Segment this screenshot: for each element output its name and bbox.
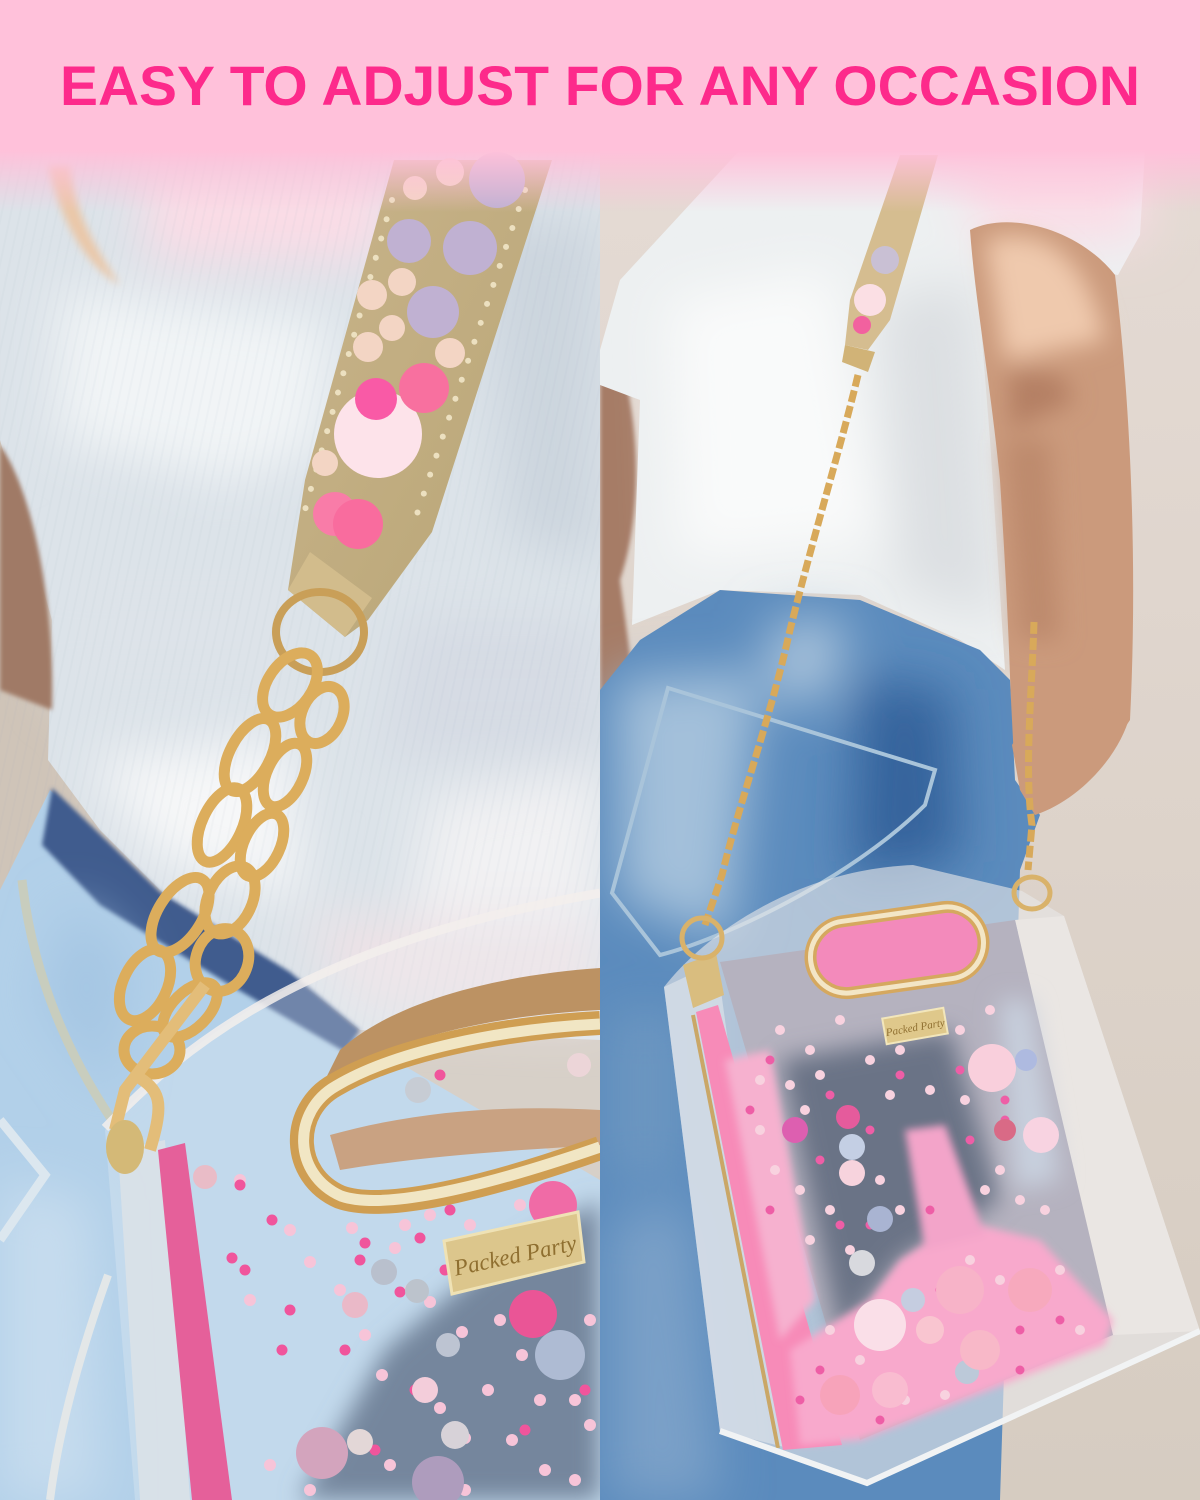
textured gold backing [325, 968, 600, 1080]
right decorated strap [842, 155, 938, 372]
strap sequins cream [312, 158, 465, 476]
right large sequins [782, 1044, 1059, 1415]
right upper arm [970, 222, 1134, 744]
left chunky gold chain [109, 592, 364, 1150]
header band [0, 0, 1200, 150]
left confetti hot pink [232, 1075, 585, 1450]
strap stitch dots [305, 190, 525, 520]
panel: right full bag photo [600, 155, 1200, 1500]
right bag handle [806, 902, 988, 998]
rose band inside handle [330, 1108, 600, 1170]
pink pouch zipper [158, 1143, 232, 1500]
bag interior shadow [300, 1200, 600, 1500]
left gold oval handle [302, 1023, 600, 1202]
left shirt [0, 150, 600, 1040]
right bag interior [720, 920, 1113, 1440]
right brand plate [882, 1008, 948, 1044]
bag rim [105, 893, 600, 1128]
right jeans [600, 590, 1040, 1500]
bag bottom rim [720, 1331, 1200, 1483]
bag corner tab [683, 953, 724, 1008]
jeans seams [0, 880, 112, 1500]
pink pouch edge [696, 1005, 842, 1450]
header fade [0, 150, 1200, 212]
right far arm [600, 380, 636, 700]
strap clasp tab [106, 1120, 144, 1174]
right thin gold chain [705, 375, 1034, 925]
right bag clear body [664, 865, 1200, 1483]
right shirt [600, 150, 1145, 670]
right hand [1012, 724, 1128, 815]
right confetti light [760, 1010, 1080, 1400]
panel: left close-up photo [0, 156, 600, 1500]
chain clasps [682, 877, 1050, 958]
left brand plate [444, 1212, 584, 1294]
confetti pile [725, 1050, 1113, 1445]
right brand plate: Packed Party [884, 1017, 946, 1039]
left confetti light [240, 1180, 590, 1490]
left brand plate: Packed Party [451, 1230, 579, 1281]
right confetti pink [750, 1060, 1060, 1420]
title: EASY TO ADJUST FOR ANY OCCASION [60, 54, 1140, 117]
left arm skin [0, 445, 52, 710]
strap sequins glitter [387, 152, 525, 338]
clear bag [105, 890, 600, 1500]
back pocket [612, 688, 935, 955]
left large sequins [193, 1053, 591, 1500]
left jeans [0, 788, 600, 1500]
left decorated strap [288, 152, 552, 637]
